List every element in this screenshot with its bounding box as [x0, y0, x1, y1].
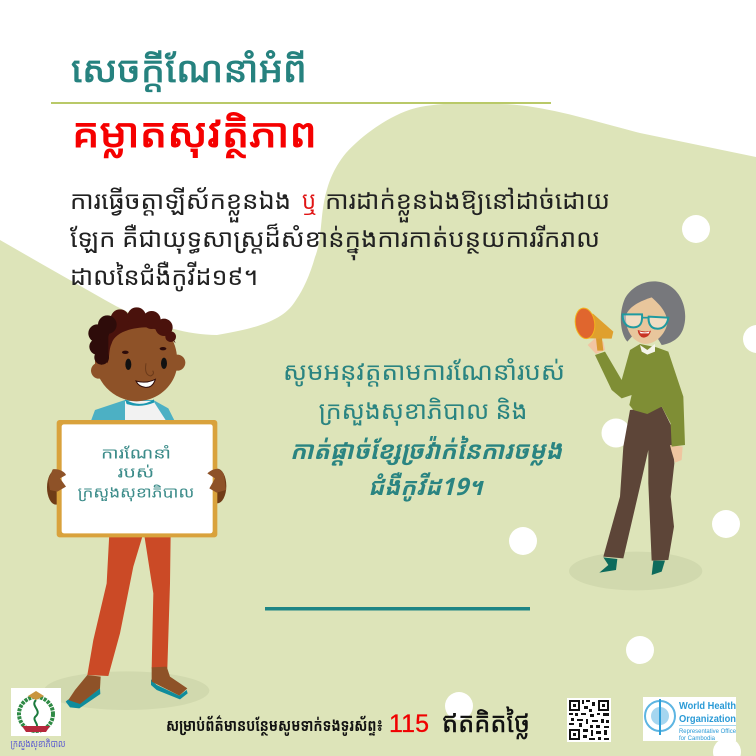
text block: intro paragraph: ការដាក់ខ្លួនឯងឱ្យនៅដាច់ដោយ: [325, 183, 610, 222]
footer: hotline message: សម្រាប់ព័ត៌មានបន្ថែមសូមទាក់ទងទូរស័ព្ទ៖: [166, 713, 383, 736]
illustration: woman with megaphone: [569, 281, 702, 590]
text block: call to follow guidance: សូមអនុវត្តតាមការណែនាំរបស់: [283, 354, 565, 388]
text block: intro paragraph: ឬ: [302, 183, 317, 217]
logo: World Health Organization: Representative Office: [679, 729, 737, 735]
QR code: [567, 698, 611, 742]
sign board: ក្រសួងសុខាភិបាល: [78, 482, 194, 502]
heading: physical distancing: គម្លាតសុវត្ថិភាព: [72, 104, 317, 159]
logo: ministry of health: [10, 688, 66, 750]
logo: World Health Organization: for Cambodia: [679, 736, 716, 742]
logo: World Health Organization: [643, 697, 737, 742]
text block: call to follow guidance: [283, 354, 565, 503]
text block: intro paragraph: ដាលនៃជំងឺកូវីដ១៩។: [70, 259, 258, 293]
footer: hotline message: [166, 703, 530, 740]
text block: call to follow guidance: ជំងឺកូវីដ19។: [368, 470, 484, 503]
text block: intro paragraph: ឡែក គឺជាយុទ្ធសាស្រ្តដ៏សំខាន់ក្នុងការកាត់បន្ថយការរីករាល: [70, 221, 600, 261]
sign board: [57, 420, 217, 537]
footer: hotline message: 115: [389, 710, 429, 738]
footer: hotline message: ឥតគិតថ្លៃ: [442, 703, 530, 740]
text block: intro paragraph: ការធ្វើចត្តាឡីស័កខ្លួនឯង: [70, 183, 291, 222]
logo: World Health Organization: Organization: [679, 713, 736, 725]
logo: World Health Organization: World Health: [679, 700, 736, 712]
text block: call to follow guidance: ក្រសួងសុខាភិបាល និង: [319, 393, 527, 427]
sign board: របស់: [118, 462, 154, 482]
sign board: ការណែនាំ: [101, 444, 171, 464]
logo: ministry of health: ក្រសួងសុខាភិបាល: [10, 736, 66, 750]
title: guidance heading: សេចក្តីណែនាំអំពី: [71, 44, 307, 93]
text block: intro paragraph: [70, 183, 610, 293]
text block: call to follow guidance: កាត់ផ្តាច់ខ្សែច្រវ៉ាក់នៃការចម្លង: [290, 433, 563, 467]
illustration: man holding sign: [44, 307, 226, 710]
